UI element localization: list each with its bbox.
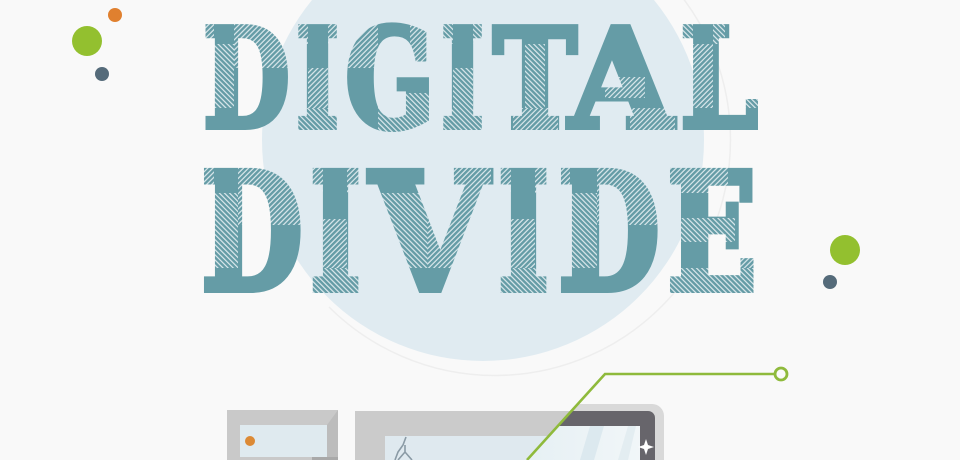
outline arc xyxy=(329,0,730,375)
tree icon xyxy=(395,437,412,460)
title line 1: T xyxy=(493,0,577,160)
indicator dot xyxy=(245,436,255,446)
icon: desktop monitor xyxy=(227,410,338,460)
title line 2: I xyxy=(310,138,361,328)
title line 2: D xyxy=(201,138,303,328)
title line 2: V xyxy=(369,138,490,328)
title line 1: D xyxy=(203,0,290,160)
title line 2: I xyxy=(498,138,549,328)
connector line with node xyxy=(527,368,787,460)
icon: tablet xyxy=(355,404,664,460)
title line 1: G xyxy=(345,0,435,160)
title line 2: D xyxy=(558,138,660,328)
title line 1: A xyxy=(567,0,675,160)
tablet button xyxy=(638,439,654,455)
title line 1: I xyxy=(296,0,339,160)
title line 1: L xyxy=(680,0,758,160)
decorative dots: top left xyxy=(72,8,122,81)
decorative dots: right xyxy=(823,235,860,289)
background circle xyxy=(262,0,704,361)
title line 1: I xyxy=(441,0,484,160)
title line 2: E xyxy=(667,138,757,328)
